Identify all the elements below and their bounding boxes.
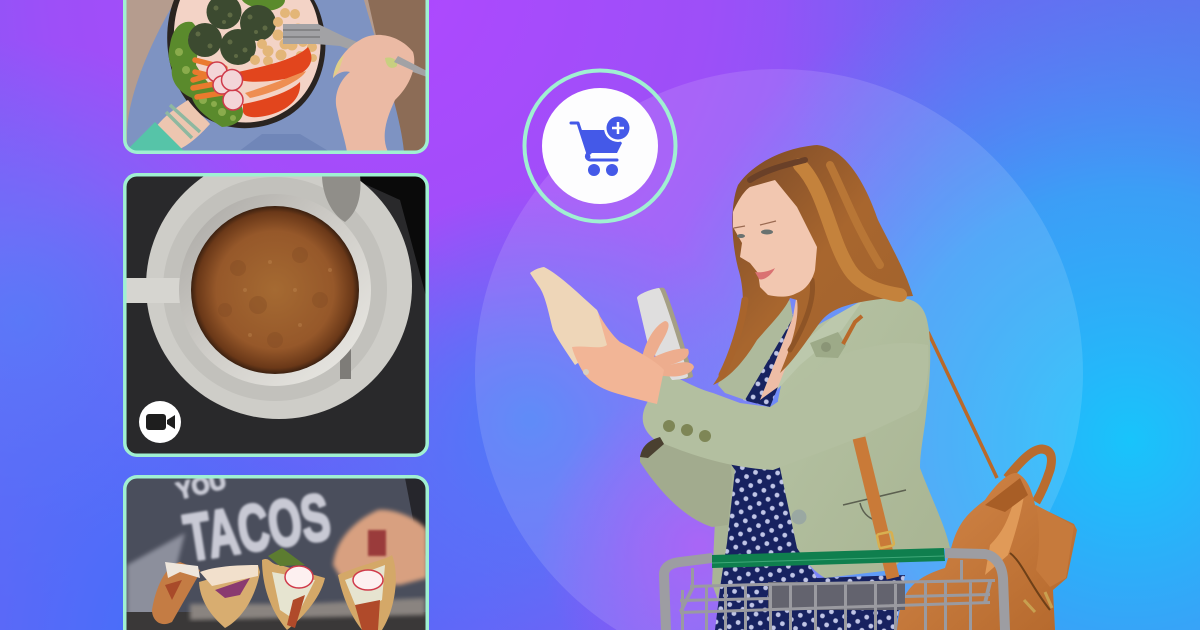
wrist — [156, 100, 210, 152]
shirt lettering: TACOS — [179, 479, 335, 575]
sleeve dark inner — [640, 437, 664, 458]
tomato slices — [238, 47, 311, 82]
hand — [333, 510, 427, 585]
hand — [333, 35, 414, 152]
card border — [125, 175, 427, 455]
chickpeas — [250, 8, 317, 66]
arm — [643, 343, 928, 470]
cart frame left — [659, 553, 712, 630]
icon: video camera — [139, 401, 181, 443]
sleeve — [130, 122, 184, 150]
photo card: coffee cup — [125, 153, 427, 455]
woman: jacket and dress — [640, 298, 950, 630]
jacket body — [778, 298, 950, 578]
taco 4 — [338, 555, 396, 630]
woman: face — [733, 180, 817, 297]
taco 1 — [152, 562, 200, 624]
bowl — [167, 0, 325, 128]
falafel — [188, 0, 276, 65]
fork — [283, 24, 427, 77]
front button — [792, 510, 806, 524]
handle — [125, 278, 183, 303]
woman: skin neckline — [760, 270, 815, 400]
counter — [125, 612, 427, 630]
cart inner panel — [768, 582, 905, 610]
phone — [637, 288, 693, 380]
jacket left front — [712, 460, 735, 600]
backpack strap thin — [928, 332, 997, 478]
shopping cart — [659, 548, 1010, 630]
card border — [123, 0, 429, 154]
hem pocket — [843, 490, 906, 505]
cart wires — [679, 560, 995, 630]
photo card: tacos — [123, 467, 429, 630]
dress — [715, 460, 905, 630]
radish — [207, 62, 243, 110]
lapel left — [718, 300, 793, 400]
package — [530, 267, 608, 365]
woman: hair highlights — [722, 160, 900, 375]
lettuce — [169, 0, 285, 127]
fork over hand — [394, 56, 426, 70]
shirt lettering — [174, 478, 332, 562]
taco 2 — [199, 565, 260, 628]
blurred napkin — [126, 532, 186, 612]
jacket pocket flap — [810, 332, 846, 358]
lapel right — [777, 300, 863, 390]
dress neckline strip — [743, 314, 793, 407]
shirt lettering: YOU — [174, 467, 229, 505]
photo card: grain bowl — [123, 0, 429, 154]
saucer — [146, 153, 412, 419]
bag handle — [1007, 449, 1051, 502]
sleeve droop — [640, 440, 732, 527]
card border — [123, 475, 429, 630]
cart frame right — [945, 548, 1010, 630]
cart handle green — [712, 548, 945, 568]
woman: eyes and mouth — [734, 221, 776, 279]
shoulder strap — [843, 316, 894, 578]
icon: add to cart badge — [524, 70, 676, 222]
large translucent circle — [475, 69, 1083, 630]
backpack — [897, 449, 1077, 630]
woman: hair — [713, 145, 913, 385]
cup — [179, 194, 371, 386]
cuff buttons — [663, 420, 711, 442]
taco 3 — [262, 559, 325, 630]
spoon — [322, 175, 360, 222]
woman: hands — [572, 313, 694, 404]
coffee — [191, 206, 359, 374]
carrots — [193, 60, 225, 97]
